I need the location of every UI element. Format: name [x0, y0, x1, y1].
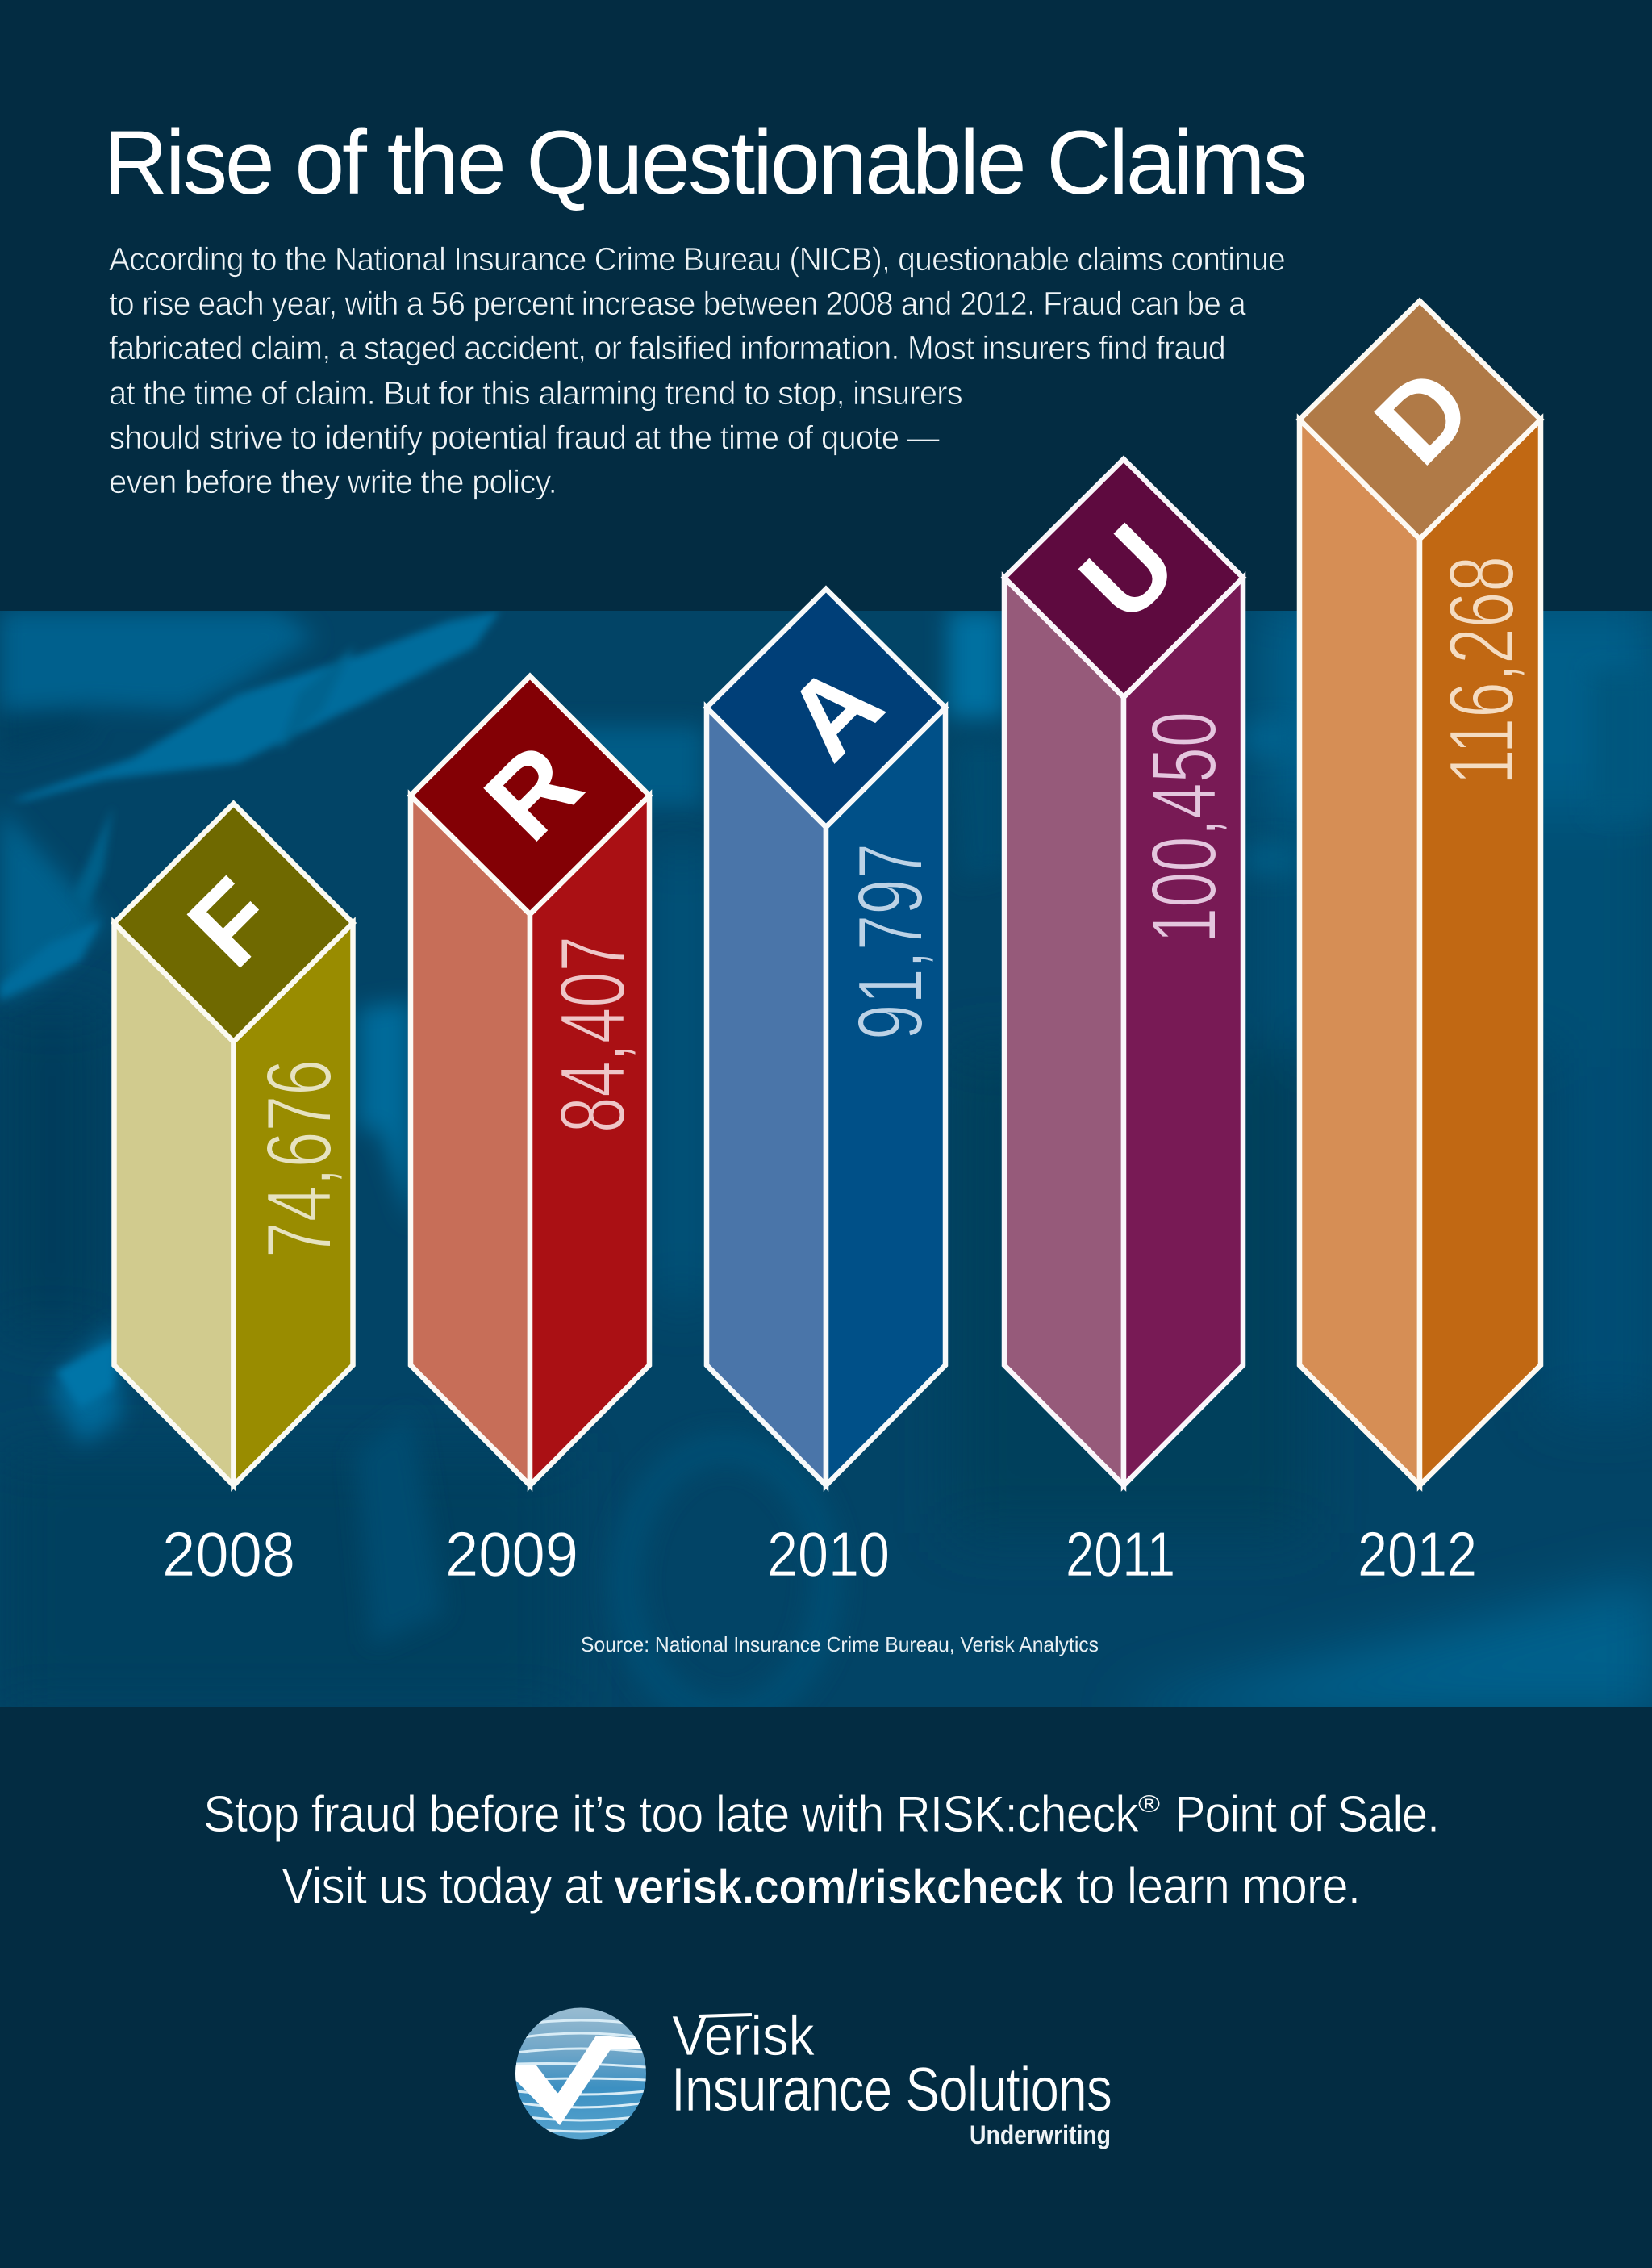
year labels: 2011: [1066, 1518, 1175, 1589]
bar 2012: D, 116,268: D: [1352, 345, 1495, 487]
bar 2009: R, 84,407: [411, 676, 649, 1485]
year labels: [162, 1518, 1477, 1589]
call to action: Stop fraud before it’s too late with RISK:check: [203, 1786, 1140, 1843]
call to action: verisk.com/riskcheck: [614, 1860, 1064, 1914]
background photo band: wrecked car: [0, 597, 1652, 1719]
year labels: 2008: [162, 1518, 295, 1589]
year labels: 2012: [1358, 1518, 1477, 1589]
bar 2011: U, 100,450: 100,450: [1133, 712, 1236, 943]
bar 2012: D, 116,268: [1299, 301, 1541, 1485]
bar 2010: A, 91,797: A: [762, 640, 905, 783]
call to action: ®: [1138, 1791, 1160, 1818]
intro text block: fabricated claim, a staged accident, or falsified information. Most insurers find fraud: [109, 329, 1225, 366]
intro text block: to rise each year, with a 56 percent increase between 2008 and 2012. Fraud can be a: [109, 285, 1246, 322]
bar 2009: R, 84,407: R: [461, 720, 604, 863]
bar 2012: D, 116,268: 116,268: [1431, 556, 1533, 785]
bar 2010: A, 91,797: [707, 589, 945, 1485]
Verisk logo: [508, 2001, 1112, 2149]
call to action: Point of Sale.: [1174, 1786, 1439, 1843]
call to action: [203, 1786, 1439, 1915]
intro text block: should strive to identify potential fraud at the time of quote —: [109, 419, 940, 456]
call to action: to learn more.: [1076, 1858, 1360, 1915]
intro text block: According to the National Insurance Crime Bureau (NICB), questionable claims continue: [109, 240, 1285, 278]
icon: striped globe with check mark: [515, 2007, 646, 2140]
call to action: Visit us today at: [282, 1858, 603, 1915]
intro text block: [109, 240, 1285, 500]
title: Rise of the Questionable Claims: [103, 112, 1305, 213]
bar 2010: A, 91,797: 91,797: [840, 843, 942, 1040]
year labels: 2010: [767, 1518, 890, 1589]
bar 2008: F, 74,676: 74,676: [248, 1059, 351, 1258]
intro text block: at the time of claim. But for this alarming trend to stop, insurers: [109, 374, 962, 411]
year labels: 2009: [445, 1518, 578, 1589]
bar 2008: F, 74,676: F: [165, 855, 299, 990]
bar 2011: U, 100,450: [1004, 459, 1243, 1485]
wordmark: Underwriting: Underwriting: [970, 2120, 1111, 2149]
intro text block: even before they write the policy.: [109, 463, 557, 500]
source note: Source: National Insurance Crime Bureau, Verisk Analytics: [581, 1632, 1099, 1656]
bar 2011: U, 100,450: U: [1057, 501, 1199, 644]
wordmark: Insurance Solutions: Insurance Solutions: [671, 2055, 1112, 2124]
bar 2009: R, 84,407: 84,407: [542, 936, 645, 1133]
wordmark: Verisk: Verisk: [672, 2004, 816, 2067]
bar 2008: F, 74,676: [115, 804, 353, 1485]
